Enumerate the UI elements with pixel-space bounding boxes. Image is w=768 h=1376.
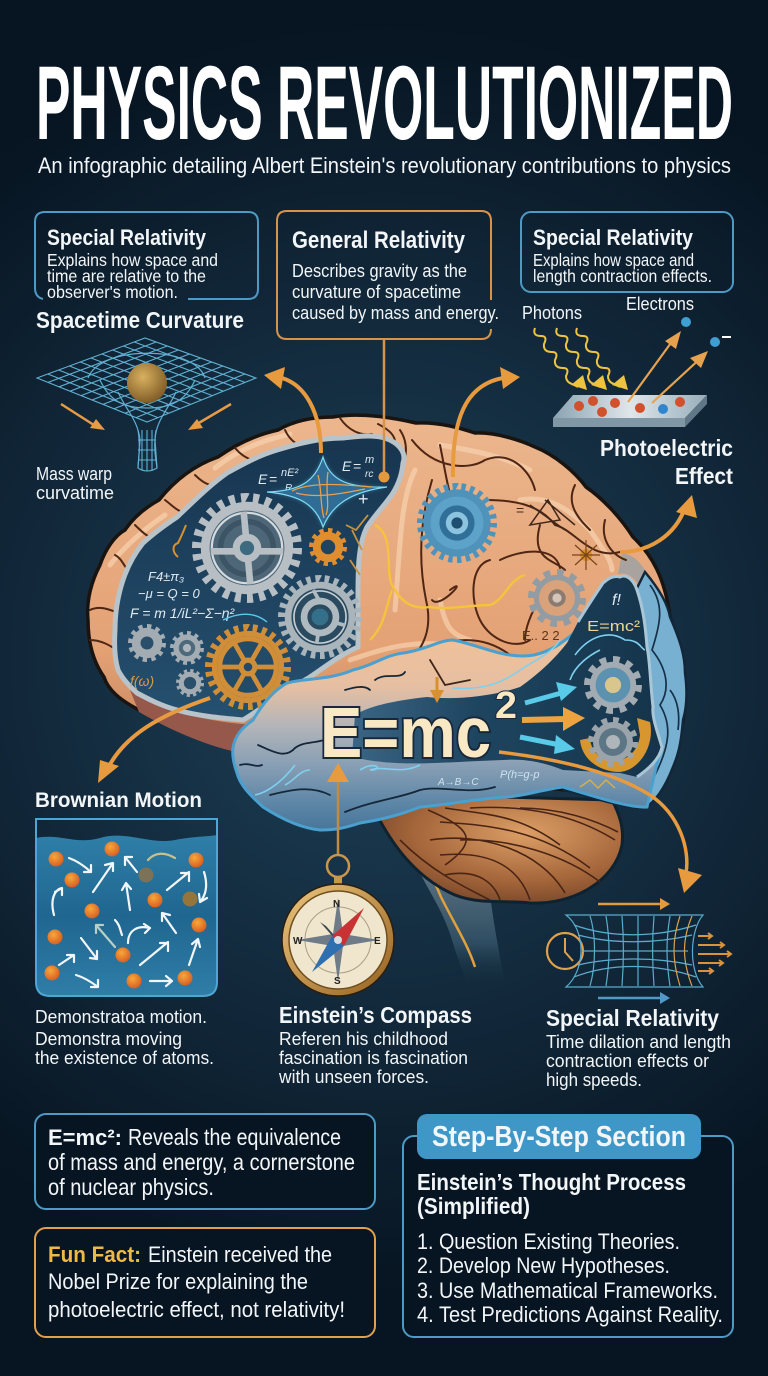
compass star — [297, 898, 379, 982]
lobe folds — [240, 660, 495, 812]
orange spoked gear — [209, 628, 287, 706]
panel: e=mc2 callout: of mass and energy, a cornerstone — [48, 1149, 355, 1175]
heading: brownian motion: Brownian Motion — [35, 788, 202, 812]
panel: special relativity, left — [35, 212, 258, 302]
panel: e=mc2 callout: Reveals the equivalence — [128, 1124, 341, 1150]
small orange gear — [311, 530, 345, 564]
panel: special relativity, right: length contraction effects. — [533, 266, 712, 286]
nerve — [421, 843, 475, 967]
flow arrows — [430, 677, 585, 754]
rear cortex folds — [650, 585, 679, 775]
blue rear cortex — [565, 572, 686, 808]
caption: einstein's compass: Einstein’s Compass — [279, 1002, 472, 1028]
cavity and lobe equations: A→B→C — [437, 777, 479, 788]
medium steel gear — [282, 579, 358, 655]
arrow: to photoelectric heading — [620, 495, 697, 552]
equations in window: F4±π₃ — [148, 569, 184, 584]
formula exponent: 2 — [495, 685, 517, 727]
metal plate — [553, 395, 707, 427]
motion arrows — [52, 854, 207, 987]
water — [36, 835, 217, 996]
equations in window: rc — [365, 469, 373, 480]
equations on cortex: = — [516, 502, 524, 518]
section heading: (Simplified) — [417, 1193, 530, 1219]
steps list: 1. Question Existing Theories. — [417, 1229, 680, 1254]
panel: special relativity, right — [521, 212, 733, 292]
steps list: 2. Develop New Hypotheses. — [417, 1253, 670, 1278]
main hemisphere — [88, 415, 686, 800]
diagram: photoelectric effect — [522, 293, 731, 427]
cavity and lobe equations — [437, 592, 640, 788]
caption: brownian motion: Demonstra moving — [35, 1028, 182, 1049]
section heading: Einstein’s Thought Process — [417, 1169, 686, 1195]
equations in window: F = m 1/iL²−Σ−η² — [130, 605, 236, 621]
grey fold above rear cortex — [618, 553, 656, 600]
panel: step-by-step section — [403, 1114, 733, 1337]
compass body — [282, 884, 394, 996]
section tab: Step-By-Step Section — [432, 1121, 686, 1153]
caption: einstein's compass — [278, 1002, 472, 1087]
left cutaway window — [115, 436, 404, 720]
illustration: brain — [88, 415, 686, 985]
panel: special relativity, left: Explains how space and — [47, 250, 218, 270]
caption: special relativity: contraction effects or — [546, 1050, 709, 1071]
small gear above cavity — [531, 572, 583, 624]
panel: fun fact: Nobel Prize for explaining the — [48, 1269, 308, 1294]
caption: brownian motion: Demonstratoa motion. — [35, 1006, 207, 1027]
cardinal letters: W — [293, 936, 303, 947]
diagram: spacetime grid — [37, 338, 256, 471]
equations on cortex: E.. 2 2 — [522, 628, 560, 643]
cavity and lobe equations: P(h=g-p — [500, 769, 539, 781]
panel: general relativity — [277, 211, 499, 339]
big steel gear — [198, 498, 296, 598]
equations in window: f(ω) — [130, 673, 154, 689]
clock — [547, 933, 583, 969]
spacetime spark — [267, 457, 387, 527]
panel: special relativity, right: Explains how space and — [533, 250, 694, 270]
equations in window: nE² — [281, 467, 298, 479]
cardinal letters: E — [374, 936, 381, 947]
section heading — [417, 1169, 686, 1219]
panel: special relativity, left: time are relative to the — [47, 266, 206, 286]
steps list: 4. Test Predictions Against Reality. — [417, 1302, 723, 1327]
panel: fun fact: photoelectric effect, not relativity! — [48, 1297, 345, 1322]
compass ring — [327, 855, 349, 877]
arrow: compass to formula — [327, 763, 349, 782]
cavity and lobe equations: f! — [612, 592, 621, 609]
equations in window: m — [365, 454, 374, 466]
panel: fun fact — [35, 1228, 375, 1337]
connector: general relativity — [378, 339, 390, 482]
particles — [44, 842, 206, 988]
panel: general relativity: General Relativity — [292, 227, 466, 254]
caption: einstein's compass: Referen his childhood — [279, 1028, 448, 1049]
equations on cortex — [516, 500, 600, 643]
ejected electrons — [628, 317, 731, 403]
cardinal letters — [293, 899, 381, 987]
cerebellum — [377, 795, 623, 903]
photon waves — [534, 328, 628, 390]
right dark cavity — [352, 576, 662, 777]
motion lines — [698, 933, 731, 974]
cortex folds — [110, 434, 612, 660]
compass cord — [337, 780, 339, 855]
arrow: to photoelectric diagram — [453, 367, 520, 477]
heading: photoelectric effect: Effect — [675, 463, 733, 489]
caption: special relativity: Special Relativity — [546, 1005, 719, 1031]
window scribbles — [174, 515, 368, 622]
diagram: time dilation — [547, 898, 731, 1004]
caption: brownian motion: the existence of atoms. — [35, 1047, 214, 1068]
panel: general relativity: curvature of spacetime — [292, 281, 461, 302]
planet mass — [127, 363, 167, 403]
caption: mass warp: curvatime — [36, 482, 114, 503]
heading: spacetime curvature: Spacetime Curvature — [36, 307, 244, 333]
velocity arrows — [598, 898, 670, 1004]
equations in window: E = — [258, 471, 277, 487]
cavity and lobe equations: E=mc² — [587, 618, 640, 635]
panel: e=mc2 callout: of nuclear physics. — [48, 1174, 214, 1200]
electric spark path — [370, 525, 525, 640]
panel: special relativity, left: Special Relativity — [47, 225, 206, 250]
equations in window: E = — [342, 458, 361, 474]
equations in window: R — [285, 483, 292, 494]
caption: einstein's compass: fascination is fascination — [279, 1047, 468, 1068]
section tab — [417, 1114, 701, 1159]
diagram: brownian beaker — [36, 819, 217, 996]
inward arrows — [61, 404, 231, 427]
label: electrons: Electrons — [626, 293, 694, 314]
cavity gears — [580, 659, 651, 772]
equations in window: −μ = Q = 0 — [138, 586, 200, 601]
panel: special relativity, left: observer's motion. — [47, 282, 178, 302]
caption: mass warp — [36, 463, 114, 503]
small steel gears — [130, 626, 202, 695]
caption: special relativity: Time dilation and length — [546, 1031, 731, 1052]
brain stem — [410, 845, 506, 985]
panel: e=mc2 callout — [35, 1114, 375, 1209]
panel: special relativity, right: Special Relativity — [533, 225, 693, 250]
cavity rim — [578, 576, 662, 777]
lower frontal shadow — [130, 690, 255, 752]
cardinal letters: N — [333, 899, 340, 910]
heading: photoelectric effect — [600, 435, 733, 489]
heading: photoelectric effect: Photoelectric — [600, 435, 733, 461]
caption: special relativity: high speeds. — [546, 1069, 642, 1090]
panel: e=mc2 callout: E=mc²: — [48, 1125, 122, 1150]
icon: compass — [282, 780, 394, 996]
panel: fun fact: Fun Fact: — [48, 1242, 141, 1267]
caption: special relativity — [546, 1005, 731, 1090]
steps list: 3. Use Mathematical Frameworks. — [417, 1278, 718, 1303]
caption: einstein's compass: with unseen forces. — [278, 1066, 429, 1087]
equations in window: + — [358, 489, 369, 509]
formula: E=mc squared: E=mc — [320, 694, 491, 773]
blue gear on cortex — [421, 487, 493, 559]
label: photons: Photons — [522, 302, 582, 323]
arrow: to special relativity — [499, 752, 702, 893]
temporal lobe — [233, 630, 660, 830]
caption: mass warp: Mass warp — [36, 463, 112, 484]
panel: general relativity: Describes gravity as the — [292, 260, 467, 281]
arrowheads on spacetime grid — [90, 419, 203, 430]
equations in window — [130, 454, 374, 689]
cardinal letters: S — [334, 976, 341, 987]
arrow: to brownian motion — [98, 698, 210, 783]
caption: brownian motion — [35, 1006, 214, 1068]
warped grid — [566, 915, 703, 987]
lobe sparks — [255, 635, 645, 795]
panel: general relativity: caused by mass and energy. — [292, 302, 499, 323]
beaker outline — [36, 819, 217, 996]
steps list — [417, 1229, 723, 1327]
panel: fun fact: Einstein received the — [148, 1242, 332, 1267]
arrow: to spacetime curvature — [264, 367, 321, 453]
